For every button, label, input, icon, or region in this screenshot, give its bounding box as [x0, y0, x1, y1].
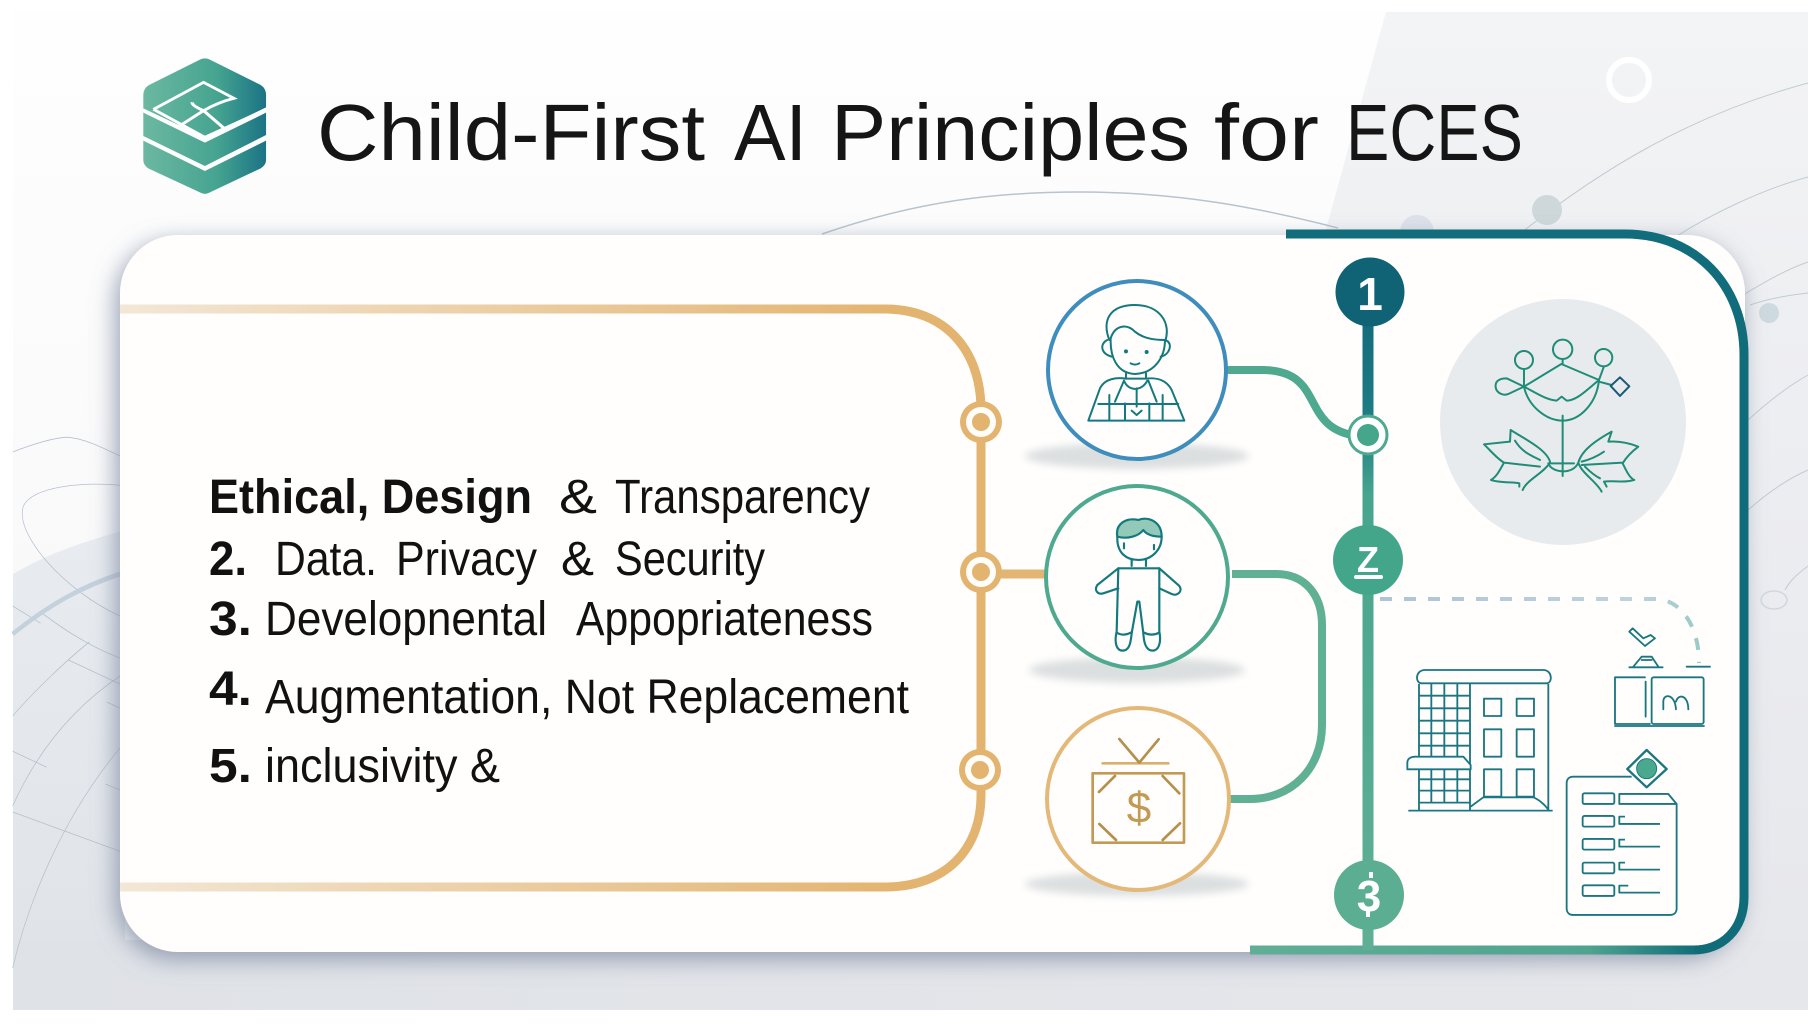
bottom green rail	[1250, 946, 1695, 954]
timeline node 2	[1333, 525, 1403, 595]
item 1: Ethical, Design	[209, 471, 532, 524]
background: top arc	[822, 192, 1338, 234]
item 2: &	[561, 533, 594, 586]
item 4: 4.	[209, 663, 252, 716]
item 2: Privacy	[396, 533, 537, 586]
outer teal border	[1286, 234, 1744, 950]
item 3	[209, 593, 873, 646]
item 1: Transparency	[615, 471, 870, 524]
background: bottom band	[13, 940, 1808, 1010]
gold bracket around principle list	[120, 309, 981, 887]
icon: building	[1407, 670, 1553, 811]
background: lower left curved region	[13, 530, 125, 1010]
timeline connector node	[1349, 416, 1387, 454]
background: pale dot	[1400, 215, 1434, 249]
icon circle: flower network	[1440, 299, 1686, 545]
principle list	[209, 471, 909, 793]
background: grey dot	[1532, 195, 1562, 225]
icon: book with check	[1615, 628, 1710, 726]
gold stub to child circle	[981, 570, 1046, 578]
background: white ring	[1609, 60, 1649, 100]
circle shadows	[1025, 443, 1249, 896]
icon circle: child portrait	[1048, 281, 1226, 459]
title	[317, 88, 1523, 177]
connector: child circle to node	[1226, 370, 1352, 435]
icon circle: money: $	[1127, 783, 1151, 832]
timeline node 1	[1336, 258, 1404, 326]
item 2	[209, 533, 765, 586]
background: top right grey shape	[1323, 12, 1808, 1010]
gold node bottom	[959, 749, 1001, 791]
background: left network lines	[13, 437, 120, 968]
item 3: 3.	[209, 593, 252, 646]
item 1: &	[559, 471, 597, 524]
icon circle: money	[1047, 708, 1229, 890]
item 3: Appopriateness	[576, 593, 873, 646]
timeline node 3	[1334, 860, 1404, 930]
gold node top	[960, 401, 1002, 443]
title: for	[1214, 88, 1319, 177]
item 2: 2.	[209, 533, 247, 586]
title: Principles	[831, 88, 1190, 177]
background: right dot	[1759, 303, 1779, 323]
timeline node 2: Z	[1357, 539, 1379, 580]
title: Child-First	[317, 88, 705, 177]
connector: second circle and money circle	[1226, 574, 1322, 799]
gold node middle	[960, 551, 1002, 593]
title: ECES	[1346, 88, 1523, 177]
title: AI	[734, 88, 807, 177]
item 1	[209, 471, 870, 524]
background: right network lines	[1517, 83, 1808, 590]
timeline node 3: 3	[1357, 872, 1381, 921]
background: right ring	[1761, 591, 1787, 609]
item 4: Augmentation, Not Replacement	[265, 671, 909, 724]
item 3: Developnental	[265, 593, 547, 646]
vertical timeline	[1362, 292, 1374, 950]
logo: layered hexagon	[143, 58, 266, 194]
timeline node 1: 1	[1357, 268, 1383, 320]
main card	[120, 235, 1745, 952]
item 5: 5.	[209, 740, 252, 793]
icon: checklist document	[1567, 750, 1677, 915]
item 2: Data.	[275, 533, 377, 586]
icon circle: child figure	[1046, 486, 1228, 668]
item 5: inclusivity &	[265, 740, 500, 793]
item 2: Security	[615, 533, 765, 586]
dashed link	[1380, 599, 1699, 663]
